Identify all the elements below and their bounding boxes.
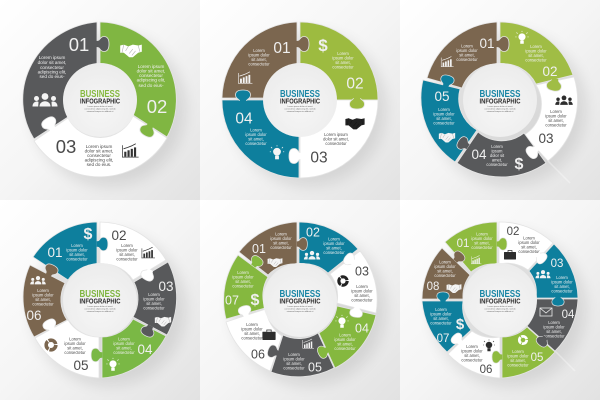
step 02 green	[300, 22, 378, 100]
center label: BUSINESS	[480, 88, 520, 100]
step 07 green: ipsum dolor	[232, 274, 254, 280]
step 07 teal: sit amet,	[433, 316, 449, 321]
step 01 gray: sed do eius-	[39, 74, 65, 79]
step 02 teal: Lorem	[328, 236, 340, 242]
step 06 brown: ipsum dolor	[32, 292, 54, 298]
step 02 white: Lorem	[523, 236, 535, 240]
puzzle tab 06	[42, 262, 60, 278]
step 03 white: ipsum dolor	[351, 288, 373, 294]
step 03 white: 03	[310, 150, 328, 166]
step 04 green: ipsum dolor	[113, 341, 135, 346]
center label	[463, 63, 537, 137]
step 05 teal	[421, 80, 477, 162]
step 05 teal: 05	[434, 89, 450, 104]
center label: consectetur adipiscing elit, sed do	[284, 108, 316, 110]
step 02 green: Lorem	[530, 44, 542, 49]
step 02 white: consectetur	[518, 249, 540, 254]
step 05 teal: ipsum dolor	[433, 112, 455, 116]
center label: consectetur adipiscing elit, sed do	[84, 108, 116, 110]
center label	[263, 263, 337, 337]
step 06 brown: consectetur	[32, 302, 54, 306]
step 01 gray: consectetur	[40, 65, 64, 70]
puzzle tab 03	[349, 306, 363, 318]
step 06 white: sit amet,	[464, 353, 480, 358]
step 03 gray: ipsum dolor	[143, 296, 165, 302]
step 02 white	[499, 222, 553, 270]
step 04 gray: amet,	[492, 158, 502, 162]
step 02 green	[500, 22, 573, 84]
step 02 green: consectetur	[525, 58, 547, 62]
step 05 gray: ipsum dolor	[283, 356, 305, 362]
center label: BUSINESS	[480, 288, 520, 300]
center label: BUSINESS	[80, 88, 120, 100]
step 05 white: consectetur	[64, 350, 86, 355]
step 03 gray: 03	[158, 279, 174, 294]
step 05 gray: sit amet,	[286, 361, 302, 366]
step 03 white: sit amet,	[548, 118, 564, 123]
step 08 brown: 08	[427, 281, 439, 293]
step 02 green: 02	[542, 64, 558, 79]
step 04 green	[319, 306, 376, 368]
step 04 gray	[527, 299, 578, 351]
step 08 brown: ipsum dolor	[434, 264, 456, 269]
center label: INFOGRAPHIC	[280, 98, 320, 106]
step 02 white	[100, 222, 166, 280]
step 06 white: 06	[251, 348, 265, 362]
step 05 gray: consectetur	[283, 366, 305, 370]
step 01 teal	[33, 222, 97, 280]
step 02 green: Lorem	[337, 51, 349, 56]
step 06 white	[448, 331, 500, 378]
step 04 teal: 04	[235, 110, 253, 128]
step 04 gray: 04	[562, 309, 575, 321]
step 03 teal: sit amet,	[554, 284, 570, 289]
step 04 teal: sit amet,	[248, 136, 264, 142]
step 03 white: sit amet,	[354, 293, 370, 298]
step 04 gray: consectetur	[543, 334, 565, 338]
step 01 brown: sit amet,	[459, 52, 475, 58]
step 04 teal: consectetur	[245, 141, 267, 146]
step 02 teal	[299, 222, 358, 273]
center label: eiusmod tempor incididunt ut	[287, 310, 314, 313]
step 01 green: consectetur	[471, 245, 493, 250]
step 02 green: Lorem ipsum	[138, 64, 164, 69]
step 05 teal: consectetur	[433, 120, 455, 126]
step 06 white: ipsum dolor	[241, 326, 263, 332]
step 02 green: ipsum dolor	[332, 56, 354, 60]
step 04 teal: ipsum dolor	[245, 132, 267, 137]
step 01 brown: 01	[273, 40, 291, 57]
center label: INFOGRAPHIC	[280, 298, 320, 306]
puzzle tab 04	[236, 90, 250, 102]
step 06 brown: 06	[26, 308, 42, 323]
puzzle tab 02	[546, 77, 563, 92]
step 01 teal: sit amet,	[69, 252, 85, 257]
step 04 green: 04	[137, 342, 153, 357]
puzzle tab 05	[41, 317, 59, 333]
step 07 teal	[422, 301, 471, 352]
step 04 gray: Lorem	[491, 144, 503, 149]
center label: INFOGRAPHIC	[480, 298, 520, 306]
step 04 gray: ipsum	[492, 148, 503, 154]
center label: INFOGRAPHIC	[80, 298, 120, 306]
center label: consectetur adipiscing elit, sed do	[84, 308, 116, 310]
step 04 green: 04	[355, 322, 369, 336]
step 04 green	[102, 319, 166, 378]
step 04 gray: Lorem	[548, 320, 560, 325]
puzzle tab 03	[552, 296, 564, 306]
step 04 gray: ipsum dolor	[543, 324, 565, 330]
step 07 green: Lorem	[237, 270, 249, 275]
step 01 brown: sit amet,	[273, 240, 289, 246]
step 01 gray: dolor sit amet,	[38, 60, 66, 65]
step 02 teal: sit amet,	[326, 246, 342, 250]
step 08 brown: consectetur	[434, 273, 456, 278]
step 01 teal: ipsum dolor	[66, 248, 88, 252]
step 01 brown	[222, 22, 297, 98]
step 03 white: Lorem ipsum	[324, 132, 348, 137]
step 04 gray: sit amet,	[546, 329, 562, 334]
step 01 gray: 01	[69, 34, 89, 55]
step 02 green: 02	[346, 76, 364, 92]
step 02 green: consectetur	[332, 64, 354, 70]
step 07 green	[224, 255, 268, 319]
puzzle tab 03	[524, 143, 541, 161]
step 01 brown: sit amet,	[251, 57, 267, 62]
step 04 gray: $	[515, 156, 524, 173]
step 03 white: Lorem	[356, 284, 368, 289]
step 05 white: Lorem	[69, 336, 81, 342]
step 03 white: 03	[56, 136, 76, 157]
step 03 white: consectetur	[87, 153, 111, 158]
puzzle tab 01	[497, 238, 507, 250]
puzzle tab 05	[492, 351, 502, 363]
center label: eiusmod tempor incididunt ut	[487, 310, 514, 313]
puzzle tab 08	[451, 249, 467, 265]
step 01 brown: ipsum dolor	[456, 48, 478, 53]
center label: BUSINESS	[80, 288, 120, 300]
step 02 green: sit amet,	[528, 53, 544, 58]
step 05 gray	[271, 333, 334, 377]
step 03 gray: Lorem	[148, 292, 160, 297]
step 03 gray: consectetur	[143, 306, 165, 310]
puzzle tab 07	[437, 292, 449, 302]
step 03 white: Lorem	[550, 109, 562, 114]
step 03 white: ipsum dolor	[545, 114, 567, 118]
step 01 brown: consectetur	[248, 62, 270, 66]
step 05 white: 05	[73, 358, 89, 373]
puzzle tab 02	[350, 96, 364, 109]
step 05 green: consectetur	[507, 362, 529, 368]
step 01 brown: Lorem	[461, 44, 473, 48]
step 05 green: Lorem	[512, 349, 524, 354]
step 05 white	[35, 320, 99, 378]
step 06 white	[226, 309, 282, 371]
step 06 white: Lorem	[466, 344, 478, 349]
step 04 green: consectetur	[113, 350, 135, 355]
step 05 gray: Lorem	[288, 352, 300, 357]
panel: seven-step wheel	[224, 222, 386, 386]
step 07 green: sit amet,	[235, 279, 251, 284]
panel: six-step wheel	[23, 222, 186, 386]
step 04 green: Lorem	[339, 332, 351, 338]
step 03 white: consectetur	[545, 122, 567, 128]
step 03 white: sed do eius.	[87, 162, 111, 167]
step 01 brown: 01	[252, 242, 266, 256]
puzzle tab 01	[296, 36, 309, 52]
step 01 brown	[239, 222, 297, 275]
puzzle tab 06	[449, 331, 465, 347]
step 01 brown: 01	[479, 36, 495, 51]
step 06 brown	[23, 265, 67, 337]
center label: Lorem ipsum dolor sit amet	[287, 105, 313, 108]
puzzle tab 04	[455, 135, 472, 152]
step 04 teal	[222, 100, 299, 178]
step 07 teal: $	[456, 316, 465, 333]
step 03 white	[524, 77, 577, 161]
step 04 gray: consectetur	[486, 162, 508, 167]
step 01 teal: $	[84, 226, 93, 243]
step 01 gray	[23, 22, 97, 139]
step 04 gray	[457, 132, 546, 177]
step 01 brown: Lorem	[275, 232, 287, 236]
step 03 white	[300, 100, 378, 178]
step 03 white: 03	[538, 131, 554, 146]
center label: eiusmod tempor incididunt ut	[487, 110, 514, 113]
puzzle tab 06	[237, 304, 252, 318]
puzzle tab 04	[91, 348, 102, 362]
center label: consectetur adipiscing elit, sed do	[284, 308, 316, 310]
step 04 green: ipsum dolor	[334, 337, 356, 342]
step 07 green: $	[251, 292, 260, 309]
step 08 brown	[422, 248, 470, 299]
panel: eight-step wheel	[422, 222, 586, 386]
step 03 white	[330, 251, 377, 313]
step 04 green: sit amet,	[337, 342, 353, 346]
step 03 teal: Lorem	[556, 275, 568, 280]
step 07 teal: Lorem	[435, 307, 447, 312]
step 01 brown: consectetur	[456, 57, 478, 62]
step 03 white: dolor sit amet,	[85, 148, 113, 154]
step 02 white: 02	[111, 228, 127, 243]
step 03 white: consectetur	[351, 298, 373, 302]
center label: eiusmod tempor incididunt ut	[87, 110, 114, 113]
step 02 teal: 02	[306, 226, 320, 240]
puzzle tab 01	[97, 237, 108, 251]
center label	[63, 263, 137, 337]
step 01 green: Lorem	[476, 232, 488, 236]
step 02 white: consectetur	[116, 256, 138, 262]
puzzle tab 03	[40, 115, 59, 133]
step 07 teal: ipsum dolor	[430, 312, 452, 316]
step 05 green: ipsum dolor	[507, 354, 529, 358]
step 05 gray: 05	[308, 360, 322, 374]
puzzle tab 02	[139, 266, 156, 283]
step 03 teal: consectetur	[551, 288, 573, 294]
step 07 green: consectetur	[232, 284, 254, 288]
step 03 white: consectetur	[325, 141, 347, 146]
center label	[263, 63, 337, 137]
step 03 white: 03	[355, 264, 369, 278]
step 02 green: consectetur	[139, 73, 163, 78]
step 06 white: 06	[480, 364, 492, 376]
step 01 brown: consectetur	[270, 245, 292, 250]
step 02 green: 02	[147, 96, 167, 117]
center label	[63, 63, 137, 137]
puzzle tab 07	[248, 254, 265, 270]
step 03 teal: ipsum dolor	[551, 280, 573, 284]
step 02 white: 02	[507, 226, 519, 238]
step 03 gray	[133, 262, 177, 335]
step 02 white: ipsum dolor	[116, 248, 138, 252]
puzzle tab 04	[316, 344, 331, 360]
center label: consectetur adipiscing elit, sed do	[484, 108, 516, 110]
step 06 white: consectetur	[461, 358, 483, 362]
puzzle tab 02	[138, 121, 157, 139]
step 08 brown: Lorem	[439, 260, 451, 264]
step 01 brown: Lorem	[253, 48, 265, 53]
center label	[463, 263, 537, 337]
step 05 white: ipsum dolor	[64, 341, 86, 346]
step 02 white: Lorem	[121, 243, 133, 248]
step 02 green: sit amet,	[335, 60, 351, 65]
step 02 white: sit amet,	[521, 244, 537, 250]
step 04 green: Lorem	[118, 336, 130, 342]
step 07 green: 07	[225, 294, 239, 308]
panel: four-step wheel	[222, 22, 386, 186]
step 02 white: sit amet,	[119, 252, 135, 257]
step 01 brown	[427, 22, 497, 88]
step 05 green	[502, 327, 555, 378]
step 03 white: adipiscing elit,	[85, 158, 113, 162]
center label: eiusmod tempor incididunt ut	[287, 110, 314, 113]
center label: Lorem ipsum dolor sit amet	[87, 305, 113, 308]
step 02 teal: ipsum dolor	[323, 241, 345, 246]
center label: Lorem ipsum dolor sit amet	[87, 105, 113, 108]
step 05 green: sit amet,	[510, 358, 526, 363]
step 02 green: sed do eius-	[138, 83, 164, 88]
step 02 green: dolor sit amet,	[137, 68, 165, 74]
step 07 teal: consectetur	[430, 320, 452, 326]
step 05 teal: sit amet,	[436, 116, 452, 121]
step 02 teal: consectetur	[323, 250, 345, 255]
step 05 green: 05	[531, 352, 543, 364]
panel: three-step wheel	[23, 22, 186, 186]
step 01 brown: ipsum dolor	[270, 236, 292, 241]
center label: INFOGRAPHIC	[480, 98, 520, 106]
step 01 green: ipsum dolor	[471, 236, 493, 241]
center label: Lorem ipsum dolor sit amet	[287, 305, 313, 308]
step 06 brown: Lorem	[37, 288, 49, 293]
step 01 green: sit amet,	[474, 240, 490, 246]
puzzle tab 05	[266, 344, 280, 359]
step 02 green: $	[318, 36, 328, 55]
puzzle tab 03	[139, 323, 157, 339]
step 05 white: sit amet,	[67, 346, 83, 350]
step 01 gray: Lorem ipsum	[39, 55, 65, 60]
step 04 green: sit amet,	[116, 346, 132, 350]
step 02 green: ipsum dolor	[525, 48, 547, 54]
puzzle tab 03	[289, 148, 302, 164]
step 07 teal: 07	[437, 333, 449, 345]
center label: BUSINESS	[280, 88, 320, 100]
step 01 green	[445, 222, 497, 272]
step 04 green: consectetur	[334, 346, 356, 351]
step 06 white: ipsum dolor	[461, 348, 483, 354]
step 02 white: ipsum dolor	[518, 240, 540, 245]
step 01 teal: Lorem	[71, 243, 83, 248]
puzzle tab 02	[342, 251, 358, 268]
step 04 gray: dolor sit	[490, 153, 505, 158]
step 01 brown: ipsum dolor	[248, 52, 270, 58]
step 08 brown: sit amet,	[437, 268, 453, 274]
step 03 gray: sit amet,	[146, 301, 162, 306]
step 05 teal: Lorem	[438, 107, 450, 112]
step 03 teal	[529, 244, 578, 298]
center label: BUSINESS	[280, 288, 320, 300]
step 01 teal: 01	[47, 245, 63, 260]
center label: eiusmod tempor incididunt ut	[87, 310, 114, 313]
step 02 green	[100, 22, 176, 137]
step 01 teal: consectetur	[66, 256, 88, 262]
step 01 green: 01	[457, 238, 469, 250]
center label: Lorem ipsum dolor sit amet	[487, 105, 513, 108]
step 04 gray: 04	[471, 147, 487, 162]
puzzle tab 01	[96, 36, 109, 52]
step 06 white: sit amet,	[244, 331, 260, 336]
center label: Lorem ipsum dolor sit amet	[487, 305, 513, 308]
center label: consectetur adipiscing elit, sed do	[484, 308, 516, 310]
step 03 white: Lorem ipsum	[86, 144, 112, 149]
step 06 white: Lorem	[246, 322, 258, 327]
puzzle tab 05	[439, 74, 455, 88]
step 03 white	[34, 116, 167, 177]
panel: five-step wheel	[421, 22, 586, 186]
puzzle tab 01	[297, 238, 307, 250]
step 04 teal: Lorem	[250, 128, 262, 132]
step 06 brown: sit amet,	[35, 297, 51, 302]
step 03 white: dolor sit amet,	[323, 136, 349, 142]
puzzle tab 04	[534, 333, 551, 349]
puzzle tab 01	[496, 36, 509, 52]
center label: INFOGRAPHIC	[80, 98, 120, 106]
puzzle tab 02	[533, 250, 549, 266]
step 01 gray: adipiscing elit,	[38, 70, 66, 74]
step 03 teal: 03	[551, 258, 563, 270]
step 02 green: adipiscing elit,	[137, 78, 165, 82]
step 06 white: consectetur	[241, 336, 263, 340]
